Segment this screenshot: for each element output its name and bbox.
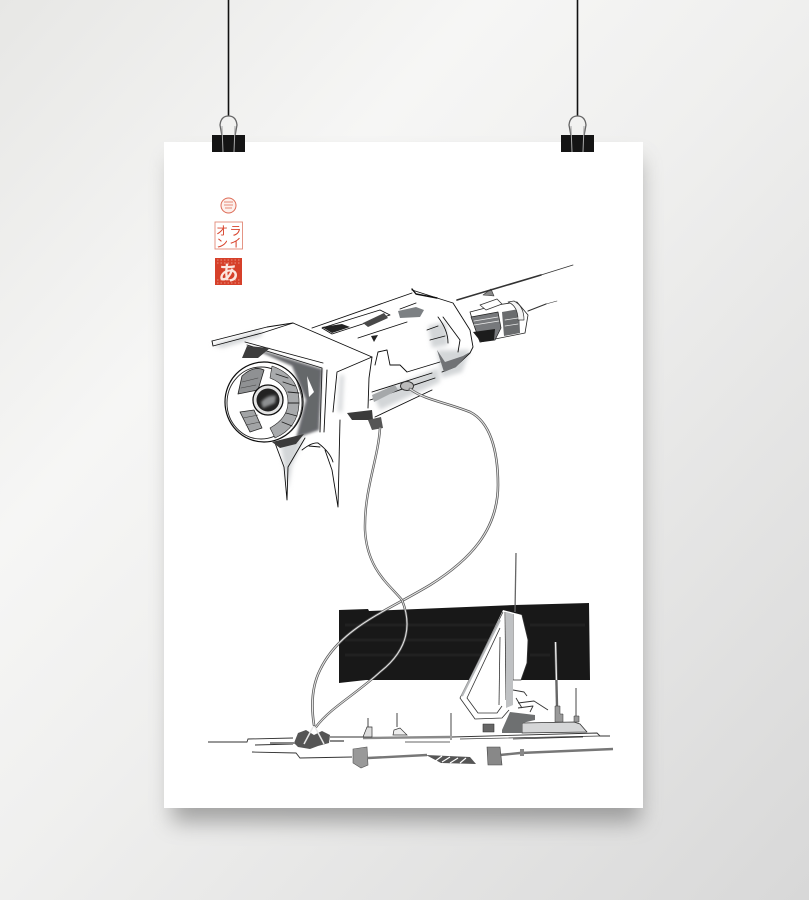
- hanging strings: [228, 0, 578, 116]
- katakana name seal: ラ: [229, 224, 242, 238]
- poster sheet: [164, 142, 643, 808]
- tower and arm white area: [460, 610, 528, 718]
- hull outlines: [212, 289, 473, 507]
- round seal: [221, 198, 236, 213]
- red seal stamps: [215, 198, 242, 285]
- tower grey column: [506, 612, 513, 708]
- lower structures: [353, 747, 524, 768]
- spaceship sketch: [212, 265, 573, 507]
- small ground towers: [363, 713, 407, 737]
- cable connector: [400, 382, 414, 390]
- launch tower: [460, 553, 587, 733]
- square red seal: あ: [218, 262, 238, 285]
- arm and tower outline: [460, 612, 528, 719]
- cable one: [312, 389, 498, 725]
- katakana name seal: [215, 222, 242, 250]
- binder clip right: [561, 116, 594, 152]
- base block: [522, 722, 587, 733]
- streaks in the block: [345, 625, 585, 655]
- katakana name seal: ン: [216, 236, 228, 250]
- arm grey strut: [462, 620, 500, 696]
- mast: [515, 553, 516, 612]
- soft grey washes around hull: [212, 322, 470, 490]
- binder clip left: [212, 116, 245, 152]
- antennae: [457, 265, 573, 311]
- night sky black block: [339, 603, 590, 683]
- cables: [312, 389, 498, 727]
- intake ring: [225, 362, 303, 442]
- cable anchor rubble: [270, 727, 344, 749]
- katakana name seal: オ: [216, 224, 228, 238]
- recessed frame shading: [247, 346, 322, 438]
- cable two: [316, 428, 407, 727]
- katakana name seal: イ: [229, 236, 242, 250]
- dark accents on hull: [322, 307, 470, 430]
- ground lines: [208, 713, 613, 758]
- rear engine: [470, 289, 528, 342]
- tall antennas: [556, 642, 557, 706]
- poster shadow: [172, 160, 640, 822]
